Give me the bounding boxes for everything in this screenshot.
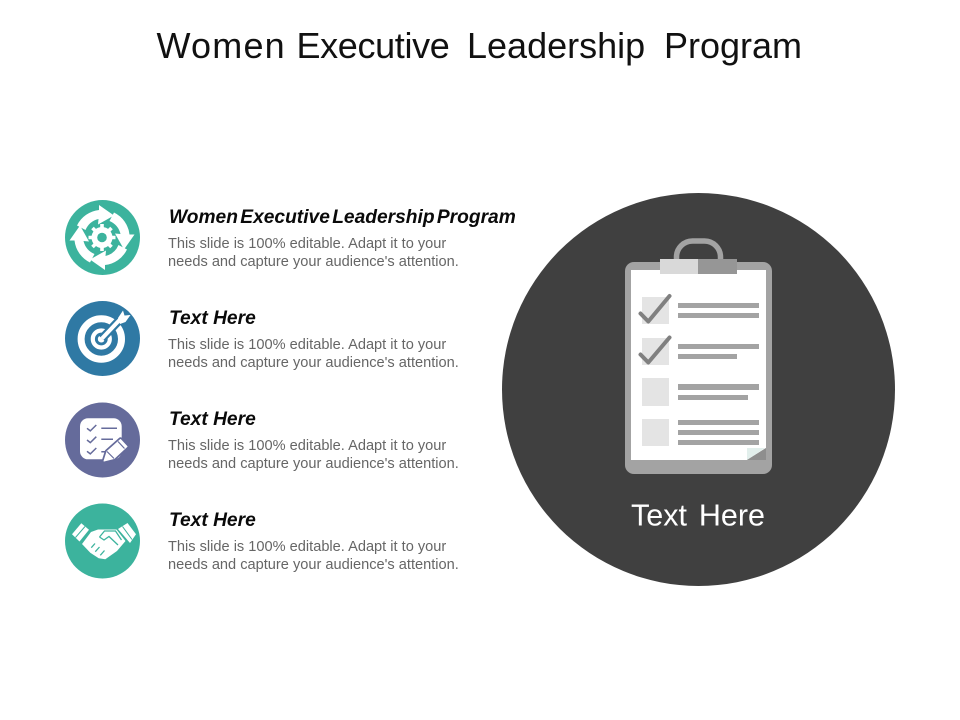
title: Program: [664, 25, 802, 66]
text block 4: [168, 510, 459, 573]
body text 4: [168, 538, 459, 573]
text block 3: [168, 409, 459, 472]
title: [156, 25, 802, 66]
icon: target with arrow: [65, 301, 140, 376]
clip: [660, 259, 737, 274]
body text 2: This slide is 100% editable. Adapt it to your: [168, 336, 446, 352]
caption: Text Here: [631, 498, 765, 532]
text block 1: [168, 207, 516, 270]
title: Women: [156, 25, 286, 66]
body text 1: This slide is 100% editable. Adapt it to your: [168, 236, 446, 252]
icon: process arrows with gear: [65, 200, 140, 275]
body text 1: needs and capture your audience's attention.: [168, 254, 459, 270]
icon: checklist with pencil: [65, 402, 140, 478]
body text 3: needs and capture your audience's attention.: [168, 456, 459, 472]
body text 1: [168, 236, 459, 270]
body text 2: needs and capture your audience's attention.: [168, 355, 459, 371]
body text 4: This slide is 100% editable. Adapt it to your: [168, 538, 446, 554]
check marks: [640, 296, 670, 362]
text block 2: [168, 308, 459, 371]
heading 2: Text Here: [169, 308, 256, 329]
clip handle: [676, 241, 720, 262]
icon: clipboard: [625, 241, 772, 474]
checkboxes: [642, 297, 669, 446]
paper: [631, 270, 766, 460]
title: Leadership: [467, 25, 645, 66]
heading 3: Text Here: [169, 409, 256, 430]
body text 4: needs and capture your audience's attention.: [168, 557, 459, 573]
body text 3: [168, 438, 459, 472]
heading 1: Women Executive Leadership Program: [169, 207, 516, 228]
icon: handshake: [65, 504, 140, 578]
folded corner: [747, 448, 766, 460]
body text 3: This slide is 100% editable. Adapt it to your: [168, 438, 446, 454]
panel: dark circle: [502, 193, 895, 586]
title: Executive: [296, 25, 449, 66]
body text 2: [168, 336, 459, 371]
heading 4: Text Here: [169, 510, 256, 531]
text lines: [678, 303, 759, 445]
board: [625, 262, 772, 474]
